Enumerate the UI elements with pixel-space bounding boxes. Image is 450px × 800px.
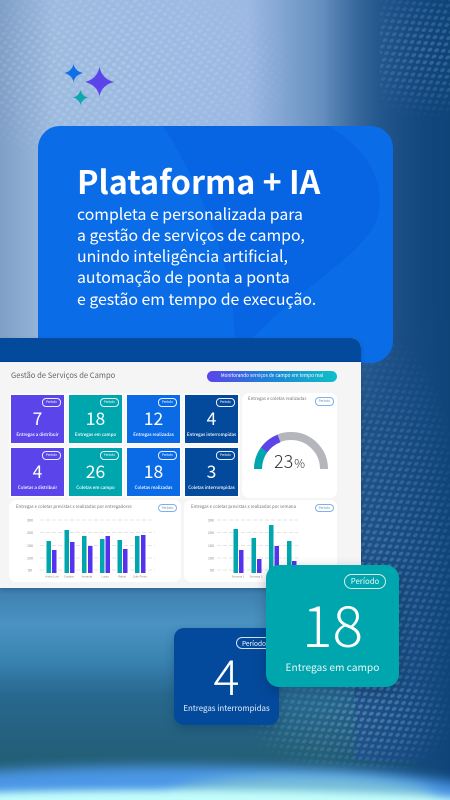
tile: entregas realizadas: Entregas realizadas <box>133 432 174 438</box>
bar chart: Amanda <box>82 574 93 578</box>
dashboard heading: Gestão de Serviços de Campo <box>11 370 115 381</box>
tile: entregas realizadas: Período <box>162 400 173 404</box>
tile: entregas interrompidas: Período <box>220 400 231 404</box>
bar chart <box>208 518 298 578</box>
panel: chart by integrator <box>9 500 181 582</box>
chart heading: Entregas e coletas previstas x realizadas por semana <box>191 504 296 510</box>
tile: entregas interrompidas: Entregas interrompidas <box>187 432 236 438</box>
period pill: Período <box>319 504 330 510</box>
tile: coletas realizadas: Período <box>162 453 173 457</box>
bar chart: Rafael <box>118 574 126 578</box>
card value: 18 <box>302 582 363 664</box>
text block: description <box>77 202 316 310</box>
tile: entregas interrompidas: 4 <box>207 406 216 431</box>
period pill: Período <box>162 504 173 510</box>
tile: coletas em campo: Período <box>104 453 115 457</box>
bar chart: João Pedro <box>133 574 148 578</box>
bar chart: André Luís <box>45 574 59 578</box>
tile: coletas interrompidas: Período <box>220 453 231 457</box>
period pill <box>158 504 177 512</box>
tile: coletas a distribuir: Período <box>46 453 57 457</box>
text block: description: unindo inteligência artificial, <box>77 244 288 267</box>
tile: entregas em campo: Entregas em campo <box>75 432 116 438</box>
tile: coletas interrompidas: Coletas interrompidas <box>188 484 235 490</box>
tile: coletas realizadas: Coletas realizadas <box>135 484 172 490</box>
tile: coletas a distribuir: Coletas a distribuir <box>18 484 57 490</box>
gauge heading: Entregas e coletas realizadas <box>248 396 306 402</box>
tile: coletas interrompidas: 3 <box>207 459 216 484</box>
text block: description: completa e personalizada para <box>77 202 303 224</box>
status pill: Monitorando serviços de campo em tempo real <box>221 373 323 379</box>
period pill: Período <box>319 398 330 402</box>
tile: entregas realizadas <box>127 395 180 443</box>
tile: coletas a distribuir <box>11 448 64 496</box>
tile: entregas a distribuir: Período <box>46 400 57 404</box>
text block: description: automação de ponta a ponta <box>77 265 290 288</box>
period pill <box>315 504 334 512</box>
dashboard header bar <box>0 338 361 362</box>
tile: entregas em campo: Período <box>104 400 115 404</box>
tile: coletas em campo: Coletas em campo <box>76 484 115 490</box>
icon: sparkles <box>64 64 114 105</box>
tile: entregas em campo: 18 <box>86 406 105 431</box>
panel: chart by week <box>184 500 337 582</box>
icon: teal sparkle <box>73 90 88 105</box>
title: Plataforma + IA <box>77 158 320 204</box>
tile: entregas interrompidas <box>185 395 238 443</box>
card value: 4 <box>213 639 240 710</box>
tile: entregas a distribuir: 7 <box>33 406 42 431</box>
card: entregas interrompidas <box>174 628 279 725</box>
icon: purple sparkle <box>85 67 114 96</box>
bar chart: 50 <box>28 568 32 572</box>
text block: description: e gestão em tempo de execução. <box>77 287 316 310</box>
period pill <box>344 574 386 589</box>
period pill <box>236 637 272 649</box>
tile: entregas em campo <box>69 395 122 443</box>
card label: Entregas em campo <box>286 659 379 674</box>
tile: coletas realizadas: 18 <box>144 459 163 484</box>
tile: coletas interrompidas <box>185 448 238 496</box>
bar chart: Semana 2 <box>250 574 263 578</box>
bar chart: Semana 1 <box>232 574 245 578</box>
tile: entregas a distribuir <box>11 395 64 443</box>
tile: coletas em campo: 26 <box>86 459 105 484</box>
card: entregas em campo <box>266 565 399 687</box>
period pill <box>315 396 334 406</box>
period pill: Período <box>351 576 379 587</box>
tile: entregas a distribuir: Entregas a distribuir <box>16 432 59 438</box>
bar chart: 200 <box>27 531 33 535</box>
bar chart: 50 <box>210 568 214 572</box>
bar chart: 150 <box>208 544 214 548</box>
tile: entregas realizadas: 12 <box>144 406 163 431</box>
period pill: Período <box>242 638 266 648</box>
panel: headline card <box>38 126 393 363</box>
status pill <box>207 371 337 382</box>
gauge value: 23% <box>274 448 305 474</box>
card label: Entregas interrompidas <box>183 703 270 714</box>
bar chart: 100 <box>27 556 33 560</box>
bar chart: 100 <box>208 556 214 560</box>
text block: description: a gestão de serviços de campo, <box>77 223 305 246</box>
gauge chart <box>254 432 328 469</box>
panel: dashboard <box>0 338 361 588</box>
bar chart: Lucas <box>101 574 109 578</box>
tile: coletas realizadas <box>127 448 180 496</box>
bar chart: 150 <box>27 544 33 548</box>
bar chart <box>27 518 155 578</box>
tile: coletas a distribuir: 4 <box>33 459 42 484</box>
bar chart: Gustavo <box>64 574 75 578</box>
icon: blue sparkle <box>64 64 83 82</box>
bar chart: 300 <box>27 518 33 522</box>
chart heading: Entregas e coletas previstas x realizadas por entregadores <box>16 504 132 510</box>
panel: gauge <box>242 393 337 498</box>
bar chart: 300 <box>208 518 214 522</box>
tile: coletas em campo <box>69 448 122 496</box>
bar chart: 200 <box>208 531 214 535</box>
